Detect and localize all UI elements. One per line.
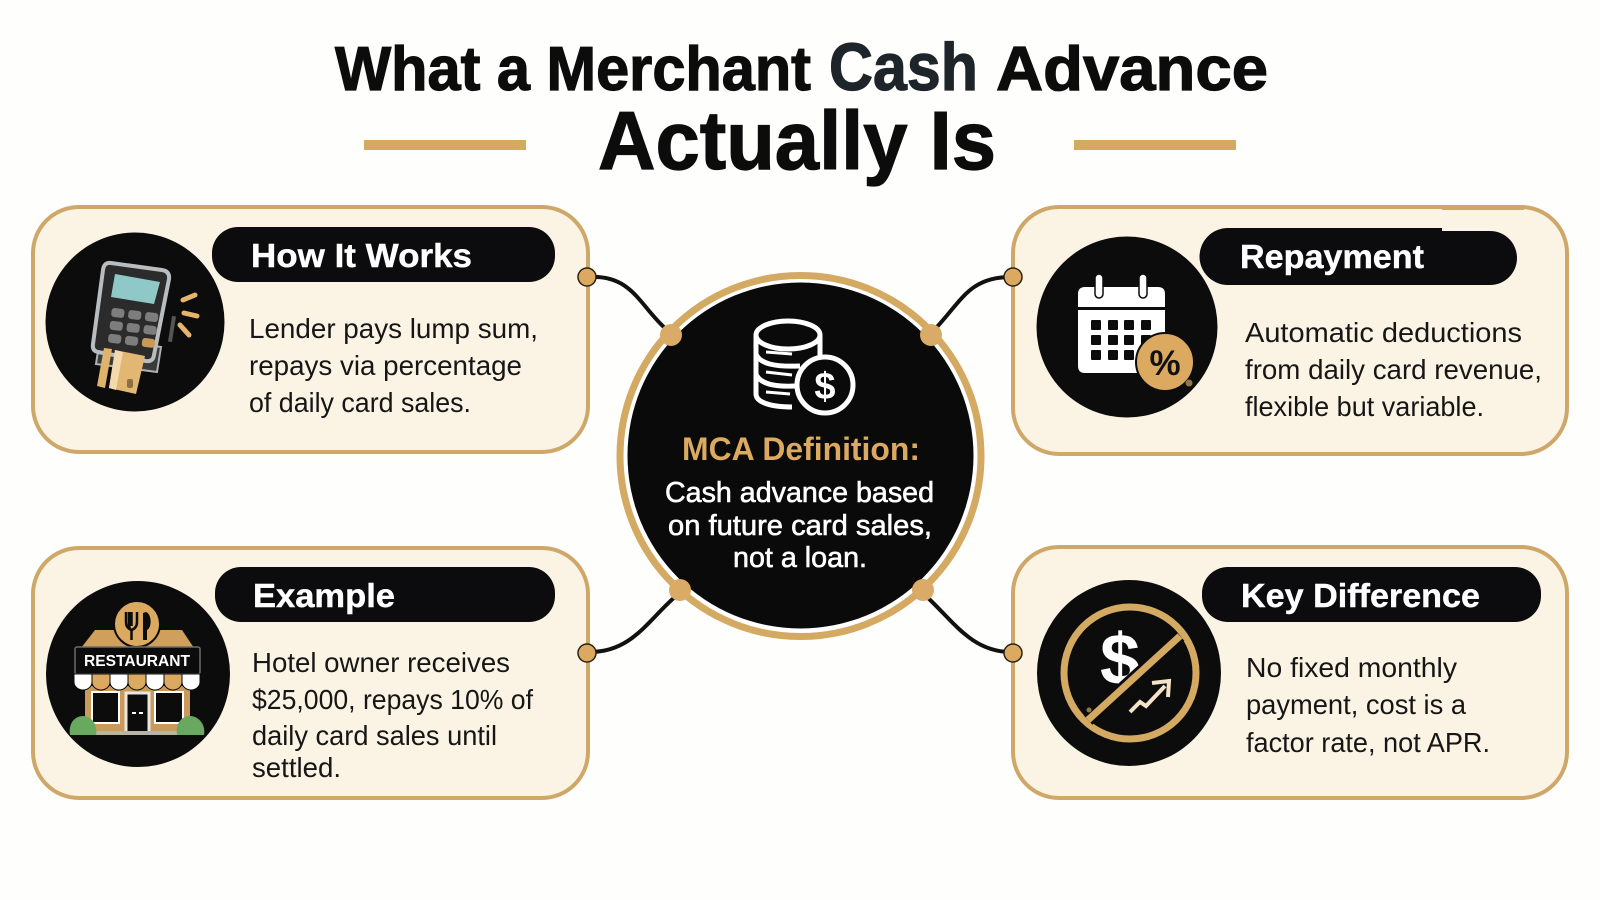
heading: How It Works bbox=[251, 237, 472, 274]
panel: example bbox=[33, 548, 588, 798]
body text: settled. bbox=[252, 752, 341, 783]
body text: repays via percentage bbox=[249, 350, 522, 381]
body text: daily card sales until bbox=[252, 720, 497, 751]
title: Advance bbox=[996, 35, 1268, 104]
heading pill bbox=[212, 227, 555, 282]
body text bbox=[1246, 652, 1490, 758]
body text: payment, cost is a bbox=[1246, 689, 1466, 720]
body text: $25,000, repays 10% of bbox=[252, 684, 533, 715]
icon: restaurant bbox=[46, 581, 230, 767]
heading pill bbox=[1202, 567, 1541, 622]
icon: calendar with percent: % bbox=[1149, 344, 1181, 383]
panel: how it works bbox=[33, 207, 588, 452]
icon: no fixed payment bbox=[1037, 580, 1221, 766]
panel: repayment bbox=[1013, 206, 1567, 454]
title: Cash bbox=[829, 30, 978, 105]
connector: repayment bbox=[936, 277, 1011, 328]
body text: flexible but variable. bbox=[1245, 391, 1484, 422]
body text: Lender pays lump sum, bbox=[249, 313, 538, 344]
heading: Example bbox=[253, 577, 395, 614]
title accent bar right bbox=[1074, 140, 1236, 150]
icon: no fixed payment: $ bbox=[1100, 620, 1140, 700]
panel: key difference bbox=[1013, 547, 1567, 798]
icon: restaurant: RESTAURANT bbox=[84, 653, 190, 670]
icon: card terminal bbox=[46, 232, 224, 412]
body text: Automatic deductions bbox=[1245, 317, 1522, 348]
connector: key difference bbox=[926, 596, 1011, 652]
connector: example bbox=[590, 596, 676, 652]
title bbox=[335, 30, 1268, 187]
body text bbox=[252, 647, 533, 783]
body text: No fixed monthly bbox=[1246, 652, 1457, 683]
title accent bar left bbox=[364, 140, 526, 150]
center heading: MCA Definition: bbox=[682, 431, 920, 467]
body text: of daily card sales. bbox=[249, 387, 471, 418]
body text: from daily card revenue, bbox=[1245, 354, 1542, 385]
center text bbox=[665, 477, 934, 574]
title: Actually Is bbox=[598, 94, 996, 187]
icon: coin stack: $ bbox=[814, 366, 836, 408]
center text: on future card sales, bbox=[668, 510, 932, 542]
icon: coin stack bbox=[756, 321, 853, 413]
heading: Key Difference bbox=[1241, 577, 1480, 614]
body text bbox=[1245, 317, 1542, 422]
title: What a Merchant bbox=[335, 35, 811, 104]
heading pill bbox=[1200, 228, 1517, 285]
heading: Repayment bbox=[1240, 238, 1424, 275]
body text: Hotel owner receives bbox=[252, 647, 510, 678]
center circle: MCA definition bbox=[620, 276, 981, 636]
body text bbox=[249, 313, 538, 418]
ring nodes bbox=[660, 324, 942, 601]
body text: factor rate, not APR. bbox=[1246, 727, 1490, 758]
center text: Cash advance based bbox=[665, 477, 934, 509]
center text: not a loan. bbox=[733, 542, 867, 574]
connector: how it works bbox=[590, 277, 666, 329]
heading pill bbox=[215, 567, 555, 622]
card connector dots bbox=[578, 268, 1022, 662]
icon: calendar with percent bbox=[1036, 236, 1218, 418]
